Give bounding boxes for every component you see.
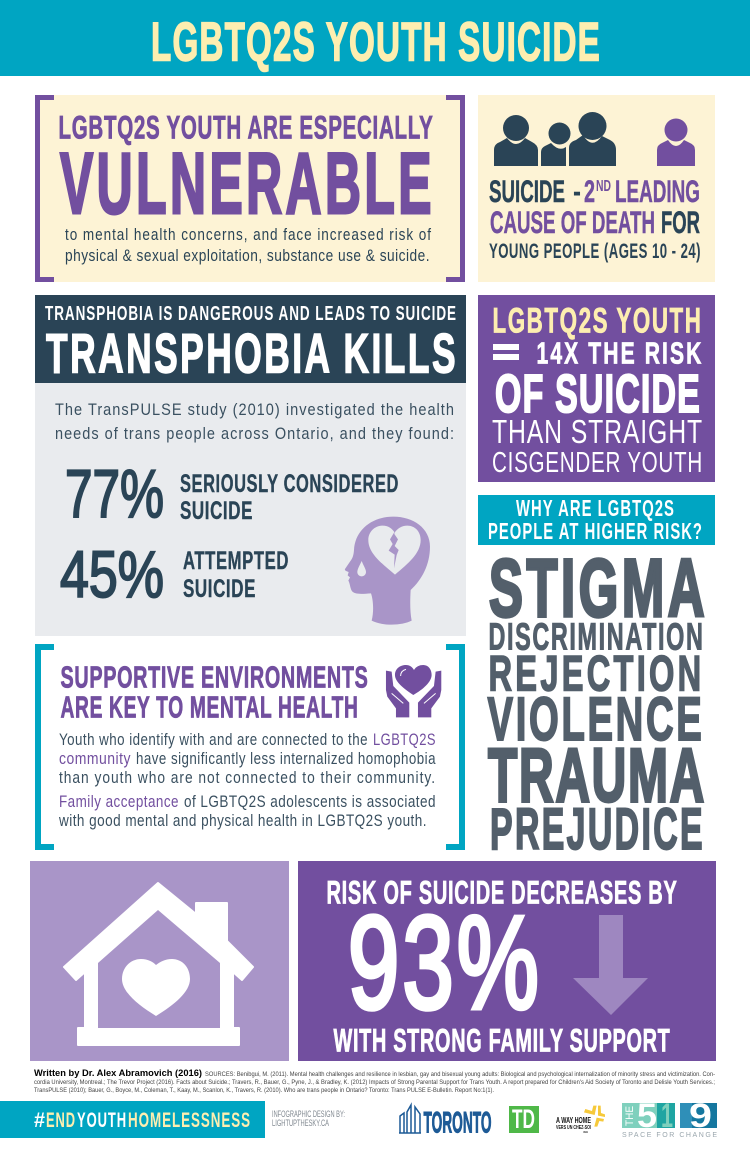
panel: vulnerable: VULNERABLE — [60, 136, 435, 232]
stat: 45 percent — [60, 538, 289, 611]
logo: the 519: 9 — [689, 1097, 712, 1135]
hashtag banner: HOMELESSNESS — [128, 1108, 251, 1132]
panel: transphobia kills header: TRANSPHOBIA IS DANGEROUS AND LEADS TO SUICIDE — [45, 302, 457, 325]
text: community connection paragraph: community — [59, 749, 131, 768]
logo: a way home: CANADA — [583, 1130, 588, 1134]
panel: supportive environments: ARE KEY TO MENTAL HEALTH — [60, 690, 358, 725]
hashtag banner: YOUTH — [77, 1108, 127, 1132]
text: community connection paragraph: have significantly less internalized homophobia — [136, 749, 436, 768]
logo: the 519 — [622, 1097, 717, 1139]
hashtag banner: END — [46, 1108, 76, 1132]
panel: 14x the risk — [478, 295, 715, 482]
icon: single person — [657, 118, 695, 166]
text: community connection paragraph: than youth who are not connected to their community. — [59, 768, 436, 787]
logo: a way home: VERS UN CHEZ-SOI — [556, 1125, 591, 1131]
panel: transpulse study: needs of trans people across Ontario, and they found: — [55, 424, 455, 443]
title banner — [0, 0, 750, 76]
icon: group of three people — [494, 112, 616, 166]
text: design credit — [272, 1109, 345, 1128]
text: author and sources: TransPULSE (2010); Bauer, G., Boyce, M., Coleman, T., Kaay, M., Scanlon, K., Travers, R. (2010). Who are trans people in Ontario? Toronto: Trans PULSE E-Bulletin. Report No:1(1). — [34, 1087, 494, 1094]
infographic canvas: TORONTO — [424, 1106, 492, 1140]
panel: transphobia kills header: TRANSPHOBIA KILLS — [46, 321, 458, 384]
logo: td — [509, 1104, 539, 1134]
text: design credit: LIGHTUPTHESKY.CA — [272, 1118, 329, 1128]
text: suicide 2nd leading cause: 2 — [584, 173, 595, 209]
panel: vulnerable: physical & sexual exploitation, substance use & suicide. — [65, 247, 430, 265]
hashtag banner: # — [34, 1108, 45, 1132]
text: author and sources — [34, 1068, 715, 1094]
panel: supportive environments: SUPPORTIVE ENVIRONMENTS — [60, 660, 368, 695]
panel: transphobia kills header — [35, 295, 466, 384]
text: family acceptance paragraph: of LGBTQ2S adolescents is associated — [184, 792, 436, 811]
panel: transpulse study: The TransPULSE study (2010) investigated the health — [55, 400, 455, 419]
icon: yellow star mark — [584, 1106, 605, 1127]
icon: hands holding heart — [386, 665, 441, 717]
panel: why higher risk heading — [478, 495, 715, 545]
icon: equals sign — [493, 344, 519, 360]
logo: the 519: SPACE FOR CHANGE — [622, 1132, 717, 1139]
panel: vulnerable — [35, 95, 465, 282]
text: suicide 2nd leading cause: - — [573, 173, 581, 209]
logo: a way home: A WAY HOME — [556, 1116, 591, 1125]
panel: second leading cause of death — [478, 95, 715, 282]
stat: 45 percent: SUICIDE — [183, 575, 256, 603]
logo: the 519: 5 — [637, 1097, 657, 1135]
stat: 45 percent: 45% — [60, 538, 164, 611]
logo: the 519: 1 — [661, 1097, 673, 1135]
panel: vulnerable: LGBTQ2S YOUTH ARE ESPECIALLY — [58, 110, 434, 146]
logo: the 519: THE — [624, 1106, 636, 1126]
text: author and sources: Written by Dr. Alex Abramovich (2016) — [34, 1068, 202, 1078]
panel: transpulse study — [35, 383, 466, 636]
text: community connection paragraph: Youth who identify with and are connected to the — [59, 730, 368, 749]
stat: 77 percent — [65, 456, 399, 532]
hashtag banner — [0, 1101, 265, 1138]
panel: house icon — [30, 861, 289, 1061]
panel: vulnerable: to mental health concerns, and face increased risk of — [65, 226, 432, 244]
text: design credit: INFOGRAPHIC DESIGN BY: — [272, 1109, 345, 1119]
panel: risk decreases: 93% — [348, 889, 542, 1036]
panel: risk decreases — [298, 861, 716, 1061]
stat: 77 percent: SERIOUSLY CONSIDERED — [180, 470, 399, 498]
icon: head with broken heart — [345, 517, 430, 625]
text: suicide 2nd leading cause: FOR — [661, 204, 700, 240]
stat: 45 percent: ATTEMPTED — [183, 547, 289, 575]
text: family acceptance paragraph — [58, 792, 436, 830]
arrow: down — [573, 915, 648, 1015]
panel: supportive environments — [35, 644, 465, 850]
stat: 77 percent: SUICIDE — [180, 497, 253, 525]
logo: td: TD — [512, 1104, 535, 1134]
text: community connection paragraph — [59, 730, 436, 787]
logo: a way home — [556, 1106, 605, 1134]
text: family acceptance paragraph: Family acceptance — [59, 792, 179, 811]
text: community connection paragraph: LGBTQ2S — [373, 730, 436, 749]
text: suicide 2nd leading cause: ND — [596, 178, 611, 195]
word stack: risk factors — [488, 543, 708, 862]
text: suicide 2nd leading cause — [489, 173, 701, 263]
icon: house with heart — [64, 883, 253, 1045]
text: family acceptance paragraph: with good mental and physical health in LGBTQ2S youth. — [58, 811, 427, 830]
stat: 77 percent: 77% — [65, 456, 164, 532]
logo: toronto — [399, 1105, 492, 1140]
text: suicide 2nd leading cause: SUICIDE — [489, 173, 565, 209]
